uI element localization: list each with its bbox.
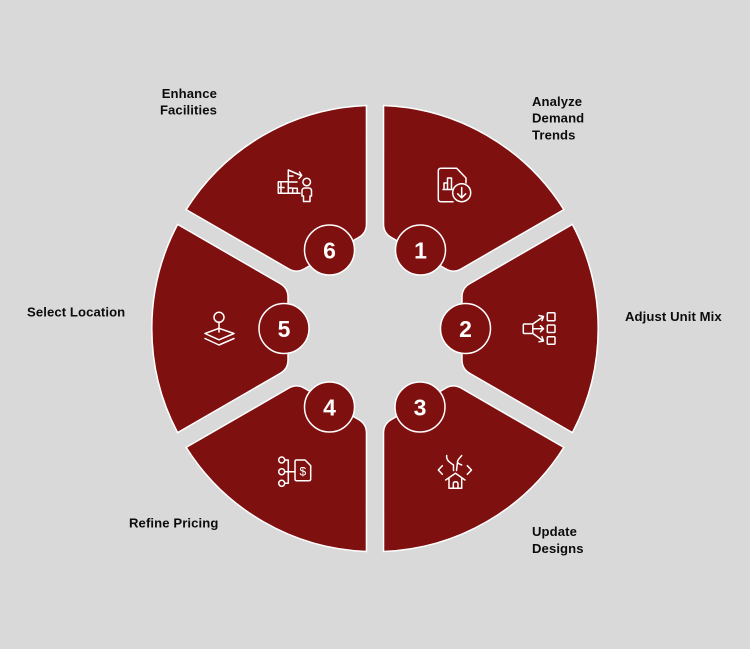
icon: building with person [278, 170, 312, 202]
icon: location pin on layers [205, 312, 234, 345]
number badge 3 [395, 382, 445, 432]
icon: pricing tree with document [279, 457, 311, 486]
label: Adjust Unit Mix: Adjust Unit Mix [625, 309, 722, 324]
number badge 1: 1 [414, 238, 427, 264]
number badge 2: 2 [459, 316, 472, 342]
number badge 3: 3 [414, 394, 426, 420]
segment 4 [173, 352, 422, 574]
label: Analyze Demand Trends: Demand [532, 111, 584, 126]
number badge 1 [396, 225, 446, 275]
segment 1 [328, 83, 577, 305]
icon: pricing tree with document: $ [299, 464, 306, 478]
number badge 6 [304, 225, 354, 275]
label: Update Designs: Update [532, 524, 577, 539]
segment 3 [328, 352, 577, 574]
label: Enhance Facilities: Facilities [160, 103, 217, 118]
label: Update Designs: Designs [532, 541, 584, 556]
icon: unit mix flow [523, 313, 555, 344]
number badge 4: 4 [323, 394, 336, 420]
label: Analyze Demand Trends: Trends [532, 127, 576, 142]
number badge 5: 5 [278, 316, 291, 342]
number badge 5 [259, 304, 309, 354]
label: Select Location: Select Location [27, 304, 125, 320]
segment 5 [152, 224, 288, 433]
number badge 6: 6 [323, 238, 336, 264]
label: Enhance Facilities: Enhance [162, 86, 217, 101]
segment 6 [173, 83, 422, 305]
panel: circular diagram [152, 83, 598, 574]
label: Analyze Demand Trends: Analyze [532, 94, 582, 109]
number badge 2 [440, 304, 490, 354]
segment 2 [462, 224, 598, 433]
label: Refine Pricing: Refine Pricing [129, 516, 218, 530]
icon: document with chart and download [438, 168, 471, 202]
number badge 4 [304, 382, 354, 432]
icon: house with design sprout [438, 456, 472, 488]
